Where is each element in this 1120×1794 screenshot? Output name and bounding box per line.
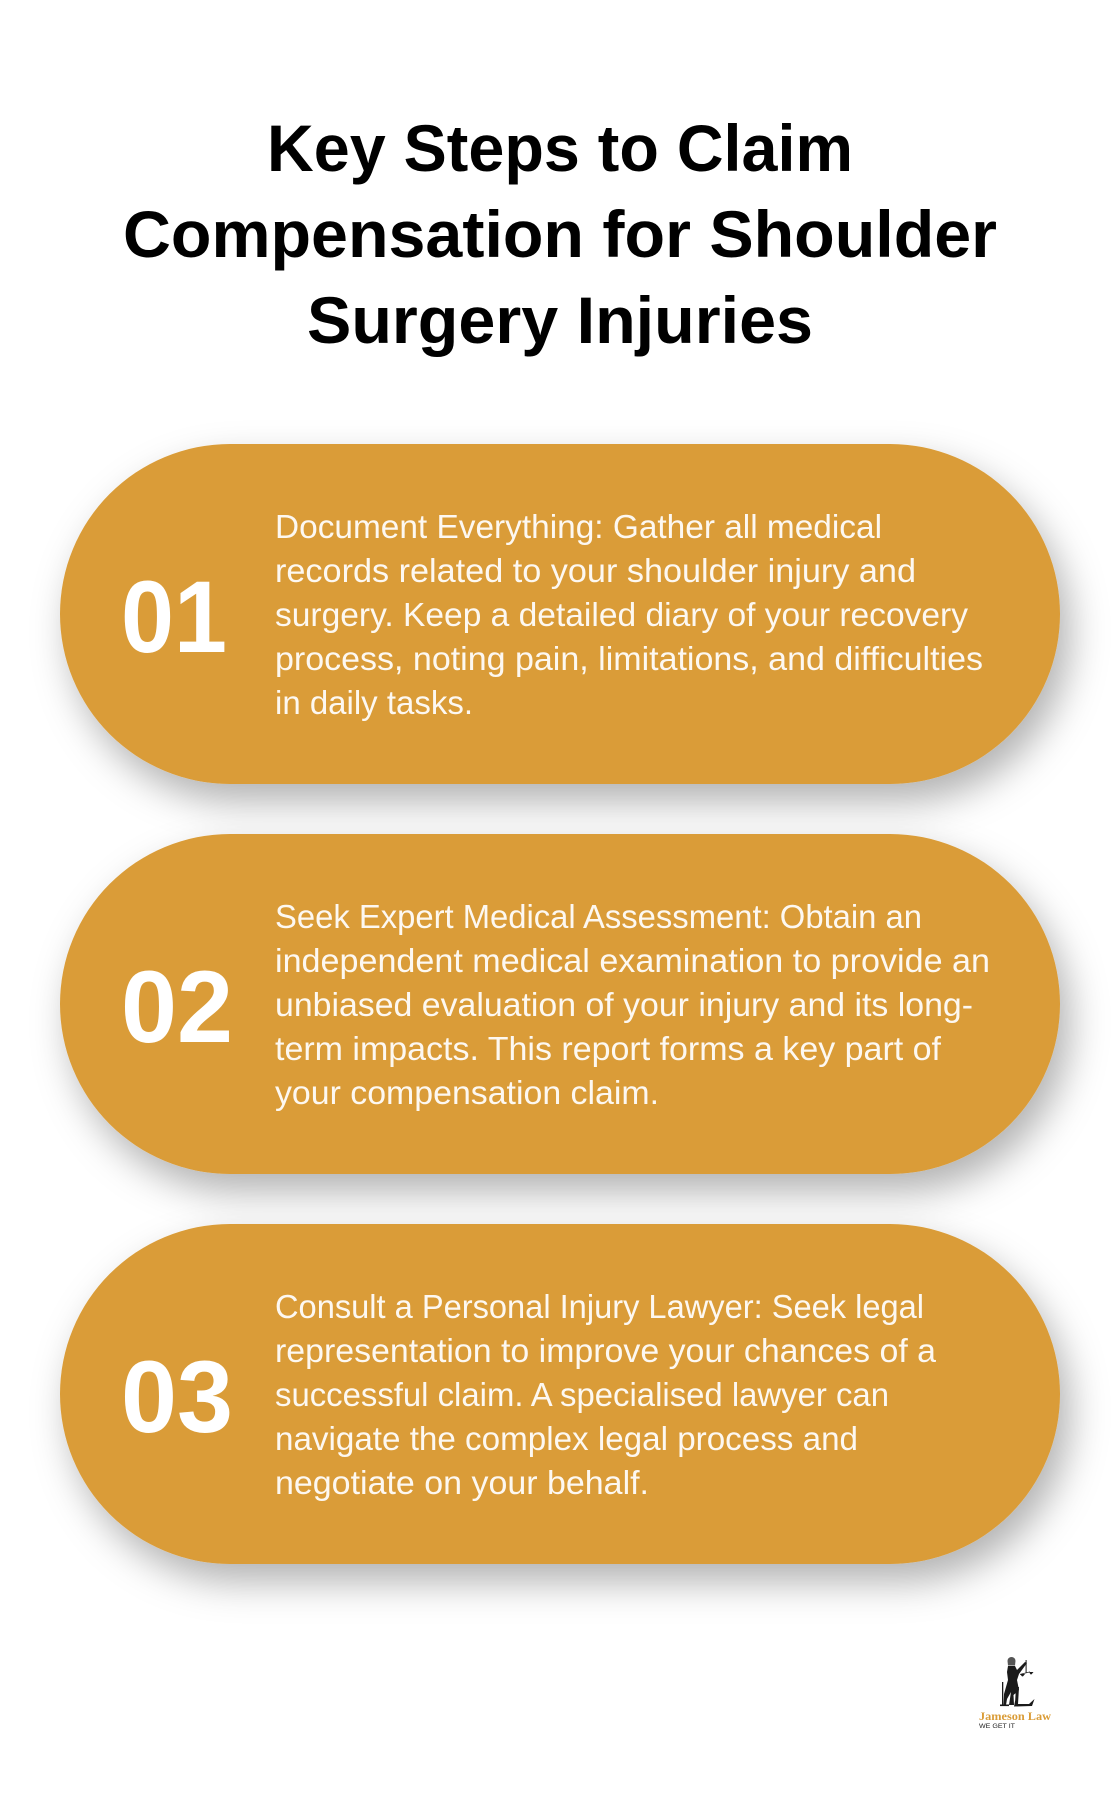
icon: lady justice [1000,1657,1034,1706]
text block 02: independent medical examination to provide an [275,942,990,979]
text block 03: representation to improve your chances of a [275,1332,937,1369]
text block 03: successful claim. A specialised lawyer can [275,1376,889,1413]
text block 01: process, noting pain, limitations, and difficulties [275,640,983,677]
number 03: 03 [121,1340,233,1454]
text block 03 [275,1288,937,1501]
text block 02 [275,898,990,1111]
title [123,111,997,357]
pill background 01 [60,444,1060,784]
number 02: 02 [121,950,233,1064]
text block 01: surgery. Keep a detailed diary of your recovery [275,596,968,633]
panel: step 01 [60,444,1060,784]
text block 02: term impacts. This report forms a key part of [275,1030,942,1067]
text block 01 [275,508,983,721]
panel: step 02 [60,834,1060,1174]
text block 01: records related to your shoulder injury and [275,552,916,589]
logo tagline: WE GET IT [979,1723,1015,1730]
pill background 02 [60,834,1060,1174]
text block 02: your compensation claim. [275,1074,659,1111]
text block 03: negotiate on your behalf. [275,1464,649,1501]
text block 01: in daily tasks. [275,684,473,721]
text block 01: Document Everything: Gather all medical [275,508,882,545]
panel: step 03 [60,1224,1060,1564]
text block 03: Consult a Personal Injury Lawyer: Seek legal [275,1288,924,1325]
number 01: 01 [121,560,227,674]
text block 02: Seek Expert Medical Assessment: Obtain an [275,898,922,935]
title: Key Steps to Claim [267,111,853,185]
pill background 03 [60,1224,1060,1564]
logo: Jameson Law [979,1657,1052,1730]
logo name: Jameson Law [979,1711,1052,1723]
text block 02: unbiased evaluation of your injury and its long- [275,986,973,1023]
title: Surgery Injuries [307,283,813,357]
text block 03: navigate the complex legal process and [275,1420,858,1457]
title: Compensation for Shoulder [123,197,997,271]
